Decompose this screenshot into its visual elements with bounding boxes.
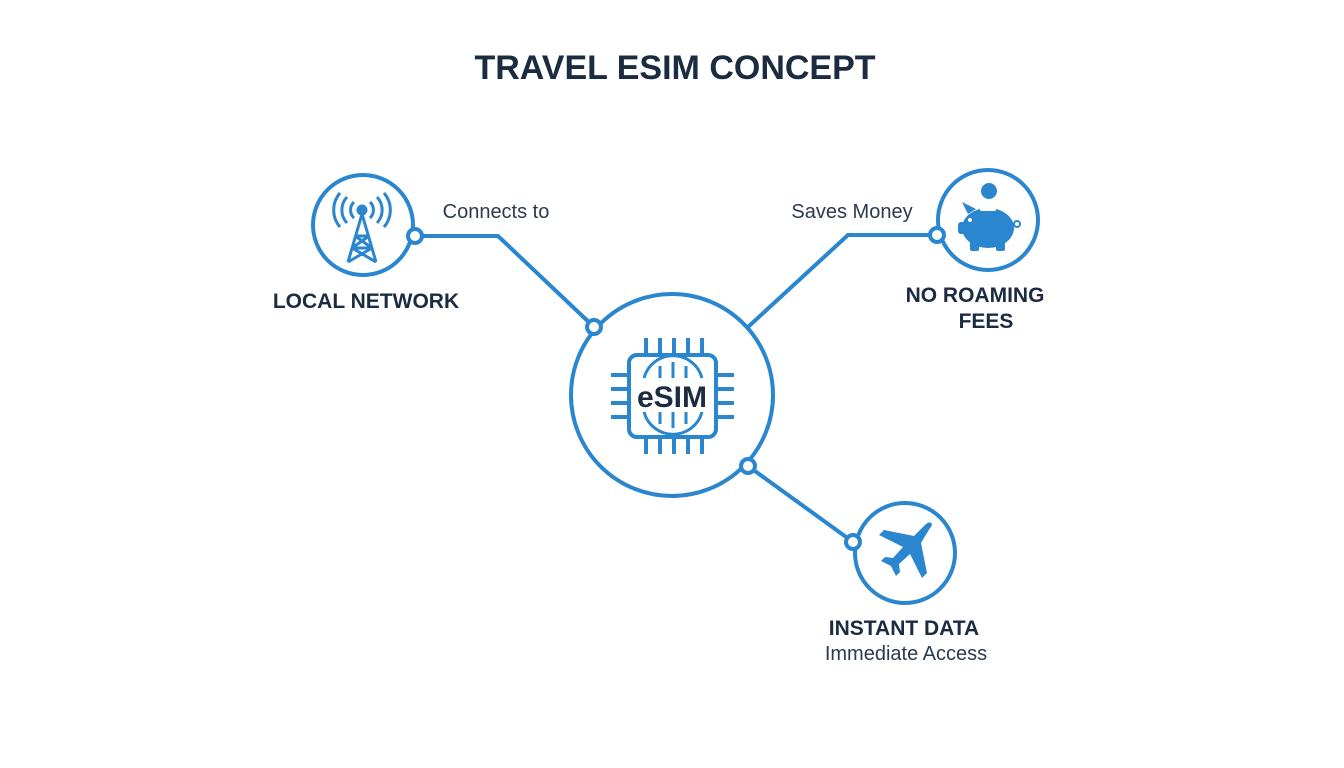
node: no roaming fees: FEES bbox=[959, 310, 1013, 333]
icon: chip bbox=[611, 338, 734, 454]
connector: instant data bbox=[748, 466, 853, 542]
node: instant data: Immediate Access bbox=[825, 643, 987, 665]
node: instant data bbox=[825, 503, 987, 665]
node: instant data: INSTANT DATA bbox=[829, 617, 979, 640]
label: saves money: Saves Money bbox=[791, 201, 913, 223]
connector: local network bbox=[415, 236, 594, 327]
central esim hub bbox=[571, 294, 773, 496]
connector nodes bbox=[408, 228, 944, 549]
node: no roaming fees: NO ROAMING bbox=[906, 284, 1044, 307]
connector: roaming bbox=[748, 235, 937, 327]
icon: piggy bank bbox=[958, 183, 1020, 251]
node: no roaming fees bbox=[906, 170, 1044, 333]
node: local network: LOCAL NETWORK bbox=[273, 290, 459, 313]
node: local network bbox=[273, 175, 459, 313]
title: TRAVEL ESIM CONCEPT bbox=[474, 49, 876, 87]
label: connects to: Connects to bbox=[443, 201, 549, 223]
central esim hub: eSIM bbox=[637, 381, 707, 414]
icon: airplane bbox=[879, 522, 932, 578]
icon: tower bbox=[334, 193, 390, 262]
